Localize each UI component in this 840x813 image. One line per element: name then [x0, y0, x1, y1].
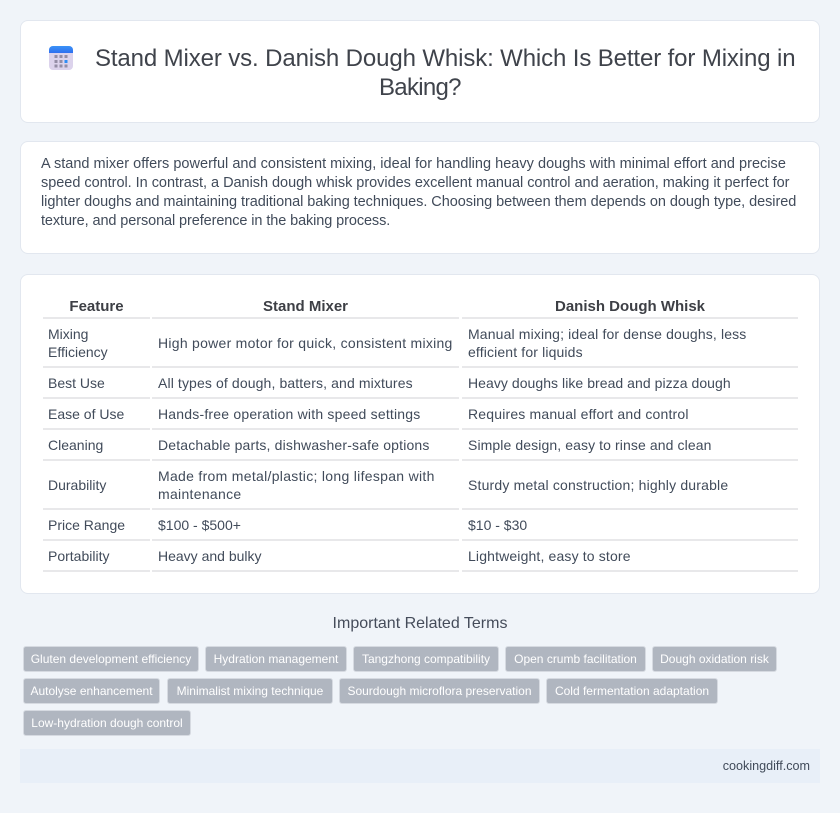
intro text: A stand mixer offers powerful and consistent mixing, ideal for handling heavy doughs with minimal effort and precise: [41, 156, 786, 172]
text: Simple design, easy to rinse and clean: [468, 437, 712, 453]
row: Ease of Use: Ease of Use: [48, 406, 124, 422]
tag: Gluten development efficiency: [31, 652, 191, 666]
tag: Sourdough microflora preservation: [347, 684, 532, 698]
footer bar: [20, 749, 820, 783]
header: Feature: Feature: [69, 298, 124, 315]
text: Sturdy metal construction; highly durable: [468, 477, 728, 493]
row: Best Use: Best Use: [48, 375, 105, 391]
tag: Hydration management: [214, 652, 338, 666]
text: Detachable parts, dishwasher-safe options: [158, 437, 430, 453]
text: efficient for liquids: [468, 344, 583, 360]
tag: [23, 678, 160, 704]
tag: Tangzhong compatibility: [362, 652, 490, 666]
text: Lightweight, easy to store: [468, 548, 631, 564]
tag: [546, 678, 718, 704]
intro card: [20, 141, 820, 254]
tag: Minimalist mixing technique: [177, 684, 323, 698]
row: Durability: Durability: [48, 477, 106, 493]
tag: [353, 646, 499, 672]
text: All types of dough, batters, and mixtures: [158, 375, 413, 391]
text: Manual mixing; ideal for dense doughs, less: [468, 326, 746, 342]
tag list: [23, 646, 777, 736]
text: maintenance: [158, 486, 241, 502]
tag: [505, 646, 646, 672]
row: Portability: Portability: [48, 548, 109, 564]
tag: [339, 678, 540, 704]
intro text: lighter doughs and maintaining traditional baking techniques. Choosing between them depends on dough type, desired: [41, 194, 796, 210]
text: Made from metal/plastic; long lifespan with: [158, 468, 435, 484]
text: $10 - $30: [468, 517, 527, 533]
tag: Dough oxidation risk: [660, 652, 769, 666]
title: [95, 45, 795, 101]
footer source text: cookingdiff.com: [723, 759, 810, 773]
title: Baking?: [379, 74, 461, 101]
table card: [20, 274, 820, 594]
tag: [23, 646, 199, 672]
row: Price Range: Price Range: [48, 517, 125, 533]
row: Mixing Efficiency: [48, 326, 108, 360]
comparison table: [42, 296, 798, 572]
row: Mixing Efficiency: Mixing: [48, 326, 88, 342]
related terms heading: Important Related Terms: [333, 615, 507, 632]
title card: [20, 20, 820, 123]
intro text: texture, and personal preference in the baking process.: [41, 213, 390, 229]
text: High power motor for quick, consistent mixing: [158, 335, 453, 351]
header: Danish Dough Whisk: Danish Dough Whisk: [555, 298, 705, 315]
tag: [23, 710, 191, 736]
tag: [652, 646, 777, 672]
text: $100 - $500+: [158, 517, 241, 533]
tag: Low-hydration dough control: [31, 716, 183, 730]
tag: Open crumb facilitation: [514, 652, 637, 666]
tag: [205, 646, 347, 672]
text: Hands-free operation with speed settings: [158, 406, 420, 422]
tag: Cold fermentation adaptation: [555, 684, 709, 698]
intro text: speed control. In contrast, a Danish dough whisk provides excellent manual control and aeration, making it perfect for: [41, 175, 789, 191]
header: Stand Mixer: Stand Mixer: [263, 298, 348, 315]
row: Cleaning: Cleaning: [48, 437, 103, 453]
row: Mixing Efficiency: Efficiency: [48, 344, 108, 360]
tag: Autolyse enhancement: [30, 684, 153, 698]
text: Heavy doughs like bread and pizza dough: [468, 375, 731, 391]
tag: [167, 678, 333, 704]
text: Requires manual effort and control: [468, 406, 689, 422]
icon: calendar: [49, 46, 73, 70]
intro text: [41, 156, 796, 229]
text: Heavy and bulky: [158, 548, 262, 564]
title: Stand Mixer vs. Danish Dough Whisk: Which Is Better for Mixing in: [95, 45, 795, 72]
